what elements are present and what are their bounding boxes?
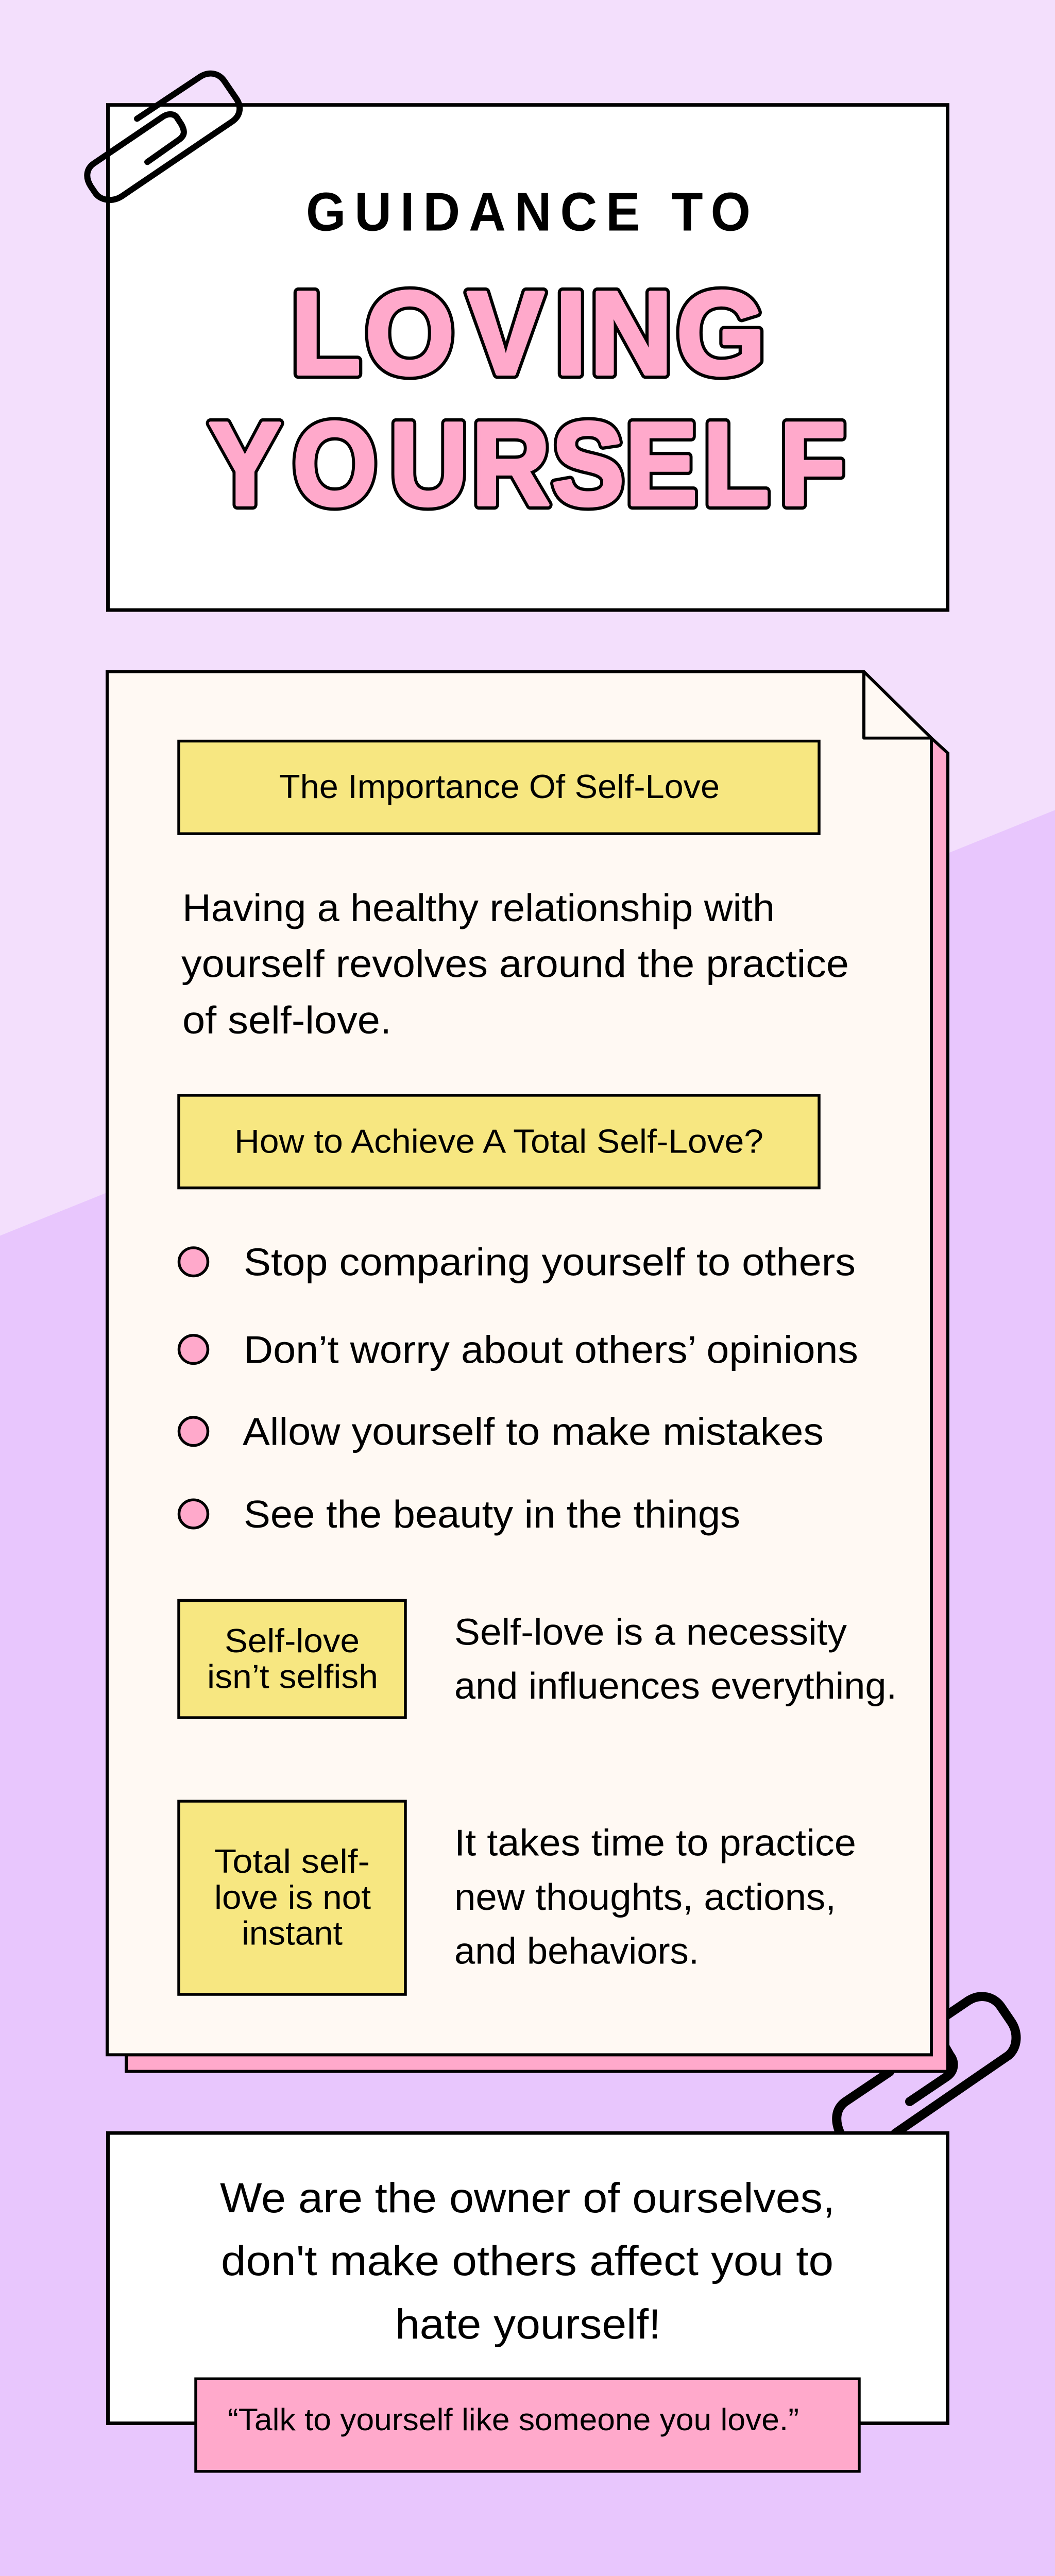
heading: the importance of self-love (179, 741, 819, 834)
title line: loving: LOVING (291, 267, 766, 399)
text block: necessity (454, 1612, 897, 1707)
callout: total self-love is not instant: instant (242, 1914, 343, 1952)
text block: intro paragraph: Having a healthy relationship with (182, 887, 775, 930)
text block: takes time (454, 1822, 856, 1972)
callout: quote: “Talk to yourself like someone you love.” (228, 2402, 799, 2437)
bullet: don't worry: Don’t worry about others’ opinions (244, 1328, 858, 1371)
icon: top paperclip (87, 74, 240, 200)
text block: intro paragraph (181, 887, 849, 1042)
bullet: stop comparing: Stop comparing yourself to others (244, 1241, 856, 1284)
text block: takes time: and behaviors. (454, 1930, 699, 1972)
text block: closing statement (220, 2174, 835, 2348)
text block: closing statement: don't make others affect you to (221, 2237, 833, 2284)
text block: takes time: It takes time to practice (454, 1822, 856, 1863)
callout: total self-love is not instant: Total self- (214, 1842, 370, 1880)
page fold (864, 672, 931, 738)
panel: main note (107, 672, 931, 2055)
callout: self-love isn't selfish (179, 1600, 405, 1718)
heading: how to achieve: How to Achieve A Total Self-Love? (234, 1123, 763, 1160)
bullet: see the beauty: See the beauty in the things (244, 1493, 740, 1536)
callout: quote (196, 2379, 859, 2471)
bullet: allow mistakes: Allow yourself to make mistakes (243, 1410, 824, 1453)
pink sheet behind panel (126, 738, 948, 2072)
callout: total self-love is not instant: love is not (214, 1879, 371, 1916)
heading: how to achieve (179, 1095, 819, 1188)
panel: closing message (108, 2133, 948, 2471)
text block: intro paragraph: of self-love. (182, 999, 392, 1042)
heading: guidance to: GUIDANCE TO (306, 181, 751, 242)
text block: necessity: and influences everything. (454, 1666, 897, 1707)
callout: self-love isn't selfish: Self-love (225, 1622, 360, 1659)
text block: necessity: Self-love is a necessity (454, 1612, 847, 1653)
icon: bottom paperclip (837, 1996, 1016, 2133)
heading: the importance of self-love: The Importance Of Self-Love (279, 768, 720, 805)
title panel (108, 105, 948, 610)
title line: loving: LOVING (291, 267, 766, 399)
text block: closing statement: We are the owner of ourselves, (220, 2174, 835, 2222)
callout: total self-love is not instant (179, 1801, 405, 1994)
text block: closing statement: hate yourself! (395, 2300, 661, 2348)
title line: yourself: YOURSELF (209, 398, 846, 530)
title line: yourself: YOURSELF (209, 398, 846, 530)
text block: intro paragraph: yourself revolves around the practice (181, 942, 849, 986)
text block: takes time: new thoughts, actions, (454, 1877, 836, 1918)
callout: self-love isn't selfish: isn’t selfish (207, 1658, 378, 1695)
